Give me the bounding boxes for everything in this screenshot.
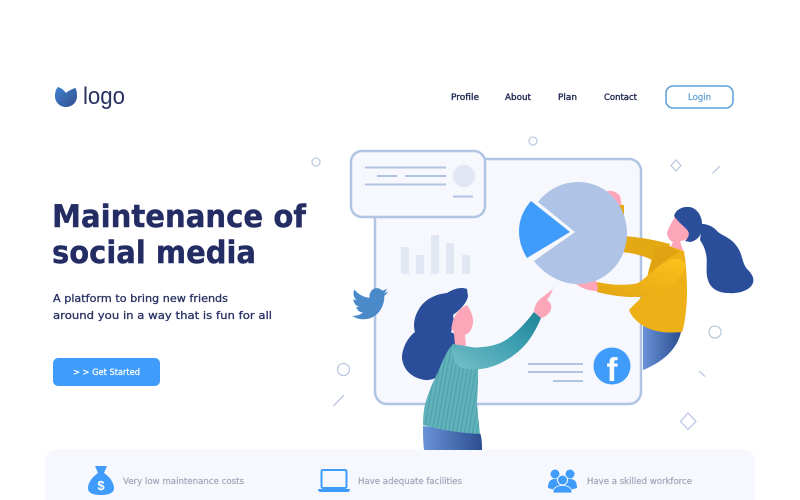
dark shoulder shading — [648, 246, 680, 280]
text lines beside facebook icon — [528, 364, 583, 381]
icon: facebook: f — [606, 351, 618, 388]
hair cap — [674, 207, 702, 242]
get started button — [53, 358, 160, 386]
upper arm — [622, 236, 670, 264]
nav item: About: About — [505, 93, 532, 103]
logo wordmark: logo — [83, 83, 125, 110]
benefit text: workforce: Have a skilled workforce — [587, 477, 692, 487]
torso sweater — [423, 344, 480, 434]
nav item: Contact: Contact — [604, 93, 638, 103]
icon: money bag — [88, 466, 114, 495]
icon: twitter bird — [352, 288, 388, 319]
title: Maintenance of — [52, 199, 306, 235]
benefit text: facilities: Have adequate facilities — [358, 477, 463, 487]
description text: A platform to bring new friends — [53, 292, 228, 305]
pie main body — [534, 182, 627, 284]
logo — [55, 83, 125, 110]
benefit text: costs: Very low maintenance costs — [123, 477, 245, 487]
shoulder sliver behind pie — [620, 205, 624, 215]
bar chart — [401, 235, 470, 274]
ponytail — [700, 224, 753, 293]
decorative ornaments — [312, 137, 721, 430]
title: social media — [52, 235, 256, 271]
description text: around you in a way that is fun for all — [53, 309, 272, 322]
person: woman pointing — [402, 288, 553, 450]
upper hand behind pie — [606, 191, 622, 207]
pants — [423, 426, 482, 450]
description text — [53, 292, 272, 322]
pointing hand — [534, 289, 553, 318]
login button: Login — [688, 93, 711, 103]
pants — [643, 326, 681, 370]
icon: laptop — [318, 470, 350, 492]
icon: people group — [548, 470, 577, 493]
face and neck — [451, 305, 473, 346]
icon: facebook — [594, 348, 630, 388]
pie blue slice — [519, 201, 570, 258]
profile card — [351, 151, 485, 217]
nav item: Plan: Plan — [558, 93, 577, 103]
lower arm sleeve — [597, 259, 685, 297]
nav item: Profile: Profile — [451, 93, 479, 103]
person: woman holding pie — [576, 191, 753, 370]
icon: money bag: $ — [97, 478, 105, 493]
raised arm — [453, 312, 541, 370]
lower hand — [576, 276, 598, 291]
dashboard board — [375, 159, 641, 404]
navigation — [451, 93, 638, 103]
logo mark — [55, 87, 77, 107]
login button — [666, 86, 733, 108]
benefits panel — [45, 449, 755, 500]
torso — [629, 246, 687, 333]
title — [52, 199, 306, 271]
earring — [451, 330, 454, 333]
get started button: > > Get Started — [73, 368, 140, 378]
neck and face — [667, 215, 690, 251]
back hair — [402, 288, 468, 380]
pie chart — [519, 182, 627, 284]
